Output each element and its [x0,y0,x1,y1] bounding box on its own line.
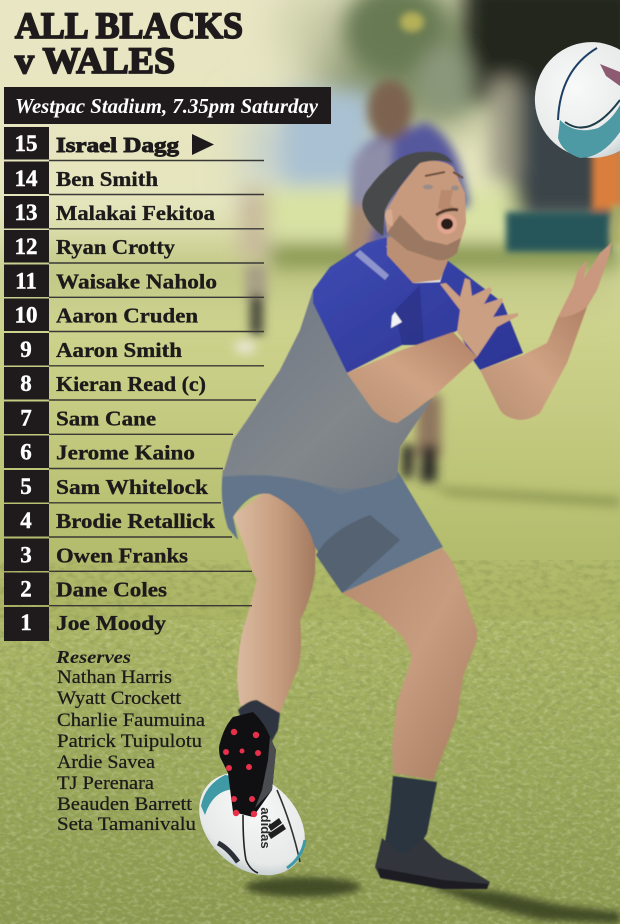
row 13: 13 [14,200,38,225]
row 7: 7 [20,406,32,430]
blue shirt [313,237,523,373]
flying rugby ball [519,26,620,174]
reserves list: Patrick Tuipulotu [57,732,202,752]
grass texture [0,560,620,924]
row 3: Owen Franks [56,544,188,568]
row 4: 4 [20,508,32,533]
row 14: Ben Smith [56,167,158,191]
reserves list: Nathan Harris [57,668,172,688]
right arm and hand [347,278,518,423]
reserves list [55,647,205,835]
row 10: Aaron Cruden [56,304,198,328]
row 12 [4,230,264,263]
row 9 [4,333,264,366]
ground rugby ball [179,752,325,896]
row 6: Jerome Kaino [56,440,195,464]
reserves list: Ardie Savea [57,753,155,773]
row 2: Dane Coles [56,578,167,602]
player catching the ball [222,152,612,889]
row 9: 9 [20,337,32,362]
left arm and hand [480,242,612,420]
shorts [222,460,443,593]
grey training vest [222,290,433,489]
row 13: Malakai Fekitoa [56,201,216,225]
head with beanie [362,152,466,283]
row 2: 2 [20,576,32,602]
row 1 [4,607,167,641]
row 5: Sam Whitelock [56,475,208,499]
left leg [233,488,316,745]
row 4: Brodie Retallick [56,509,215,533]
row 3: 3 [20,542,32,568]
row 7 [4,402,233,434]
row 5 [4,470,221,503]
row 1: Joe Moody [56,611,167,635]
row 12: 12 [14,234,38,259]
venue banner [4,87,331,124]
reserves list: Charlie Faumuina [57,711,205,731]
title [15,6,243,82]
raised boot with red studs [219,712,276,817]
row 8: Kieran Read (c) [56,372,206,396]
row 14 [4,162,264,194]
row 10 [4,298,264,332]
row 6 [4,436,223,468]
right leg [342,548,490,889]
ground rugby ball: adidas [258,807,273,849]
title: v WALES [15,41,175,82]
row 14: 14 [14,166,38,191]
row 7: Sam Cane [56,406,156,430]
row 15: 15 [14,131,38,156]
row 11 [4,264,264,297]
row 12: Ryan Crotty [56,235,176,259]
row 13 [4,196,264,229]
reserves list: TJ Perenara [57,774,154,794]
row 6: 6 [20,440,32,464]
starting team list [4,127,264,641]
reserves list: Beauden Barrett [57,795,193,815]
reserves list: Seta Tamanivalu [57,815,196,835]
row 15: Israel Dagg [56,133,180,157]
venue banner: Westpac Stadium, 7.35pm Saturday [15,94,319,118]
row 4 [4,504,232,537]
reserves list: Wyatt Crockett [57,689,182,709]
row 10: 10 [14,302,38,328]
ground shadows [245,877,620,924]
row 5: 5 [20,474,32,499]
row 8 [4,367,256,400]
row 9: Aaron Smith [56,338,182,362]
row 2 [4,572,252,606]
row 1: 1 [20,610,32,635]
row 15 [4,127,264,160]
row 3 [4,538,252,571]
title: ALL BLACKS [15,6,243,47]
row 11: 11 [15,268,37,294]
row 11: Waisake Naholo [56,270,217,294]
reserves list: Reserves [55,647,131,667]
row 8: 8 [20,371,32,396]
